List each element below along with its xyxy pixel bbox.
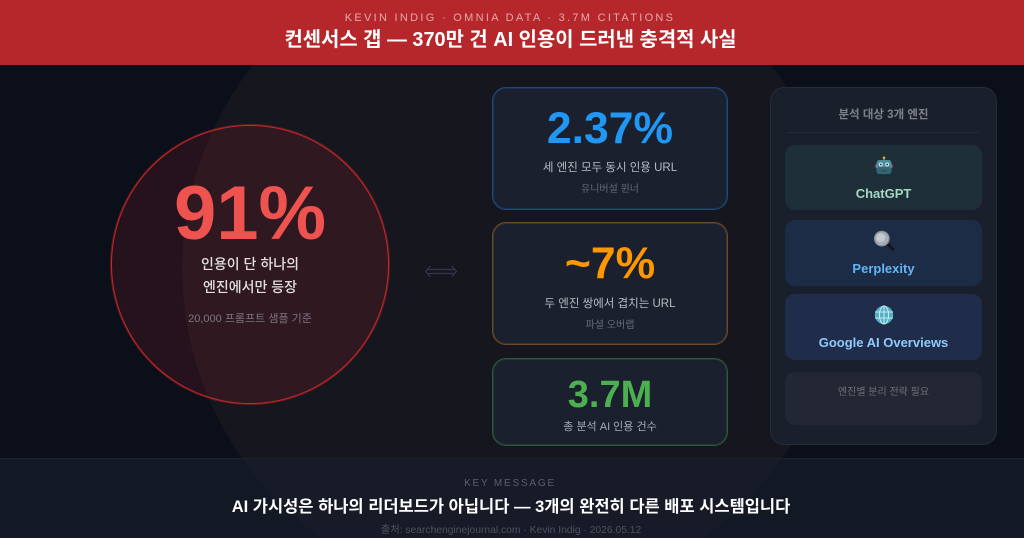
circle label: 인용이 단 하나의 <box>201 256 299 272</box>
source line: 출처: searchenginejournal.com · Kevin Indig · 2026.05.12 <box>381 525 641 536</box>
big circle: 91% <box>111 125 389 404</box>
circle label: 엔진에서만 등장 <box>203 279 297 295</box>
key message: AI 가시성은 하나의 리더보드가 아닙니다 — 3개의 완전히 다른 배포 시스템입니다 <box>232 498 790 516</box>
stat card: 3.7M <box>492 358 728 446</box>
footer eyebrow: KEY MESSAGE <box>464 478 556 489</box>
panel divider <box>787 132 979 133</box>
stat value: 2.37% <box>547 104 673 152</box>
double arrow <box>425 266 457 278</box>
stat note: 유니버설 윈너 <box>581 184 639 194</box>
header eyebrow: KEVIN INDIG · OMNIA DATA · 3.7M CITATIONS <box>345 12 675 24</box>
stat note: 파셜 오버랩 <box>586 320 634 330</box>
engine name: ChatGPT <box>856 186 911 201</box>
stat card: 2.37% <box>492 87 728 210</box>
icon: globe <box>874 306 894 324</box>
stat card: ~7% <box>492 222 728 345</box>
strategy note box <box>785 372 982 425</box>
stat label: 총 분석 AI 인용 건수 <box>563 420 657 432</box>
engine name: Google AI Overviews <box>819 335 948 350</box>
icon: robot <box>875 156 893 174</box>
engine: Google AI Overviews <box>785 294 982 360</box>
note text: 엔진별 분리 전략 필요 <box>838 387 929 398</box>
stat value: ~7% <box>565 238 655 288</box>
engine panel <box>770 87 997 445</box>
stat label: 두 엔진 쌍에서 겹치는 URL <box>544 298 676 310</box>
header band <box>0 0 1024 65</box>
background faint circle <box>182 0 842 538</box>
stat value: 3.7M <box>568 374 652 416</box>
stat label: 세 엔진 모두 동시 인용 URL <box>543 162 677 174</box>
engine name: Perplexity <box>852 261 915 276</box>
footer band <box>0 458 1024 538</box>
icon: magnifying glass <box>874 230 894 251</box>
engine: Perplexity <box>785 220 982 286</box>
engine: ChatGPT <box>785 145 982 210</box>
header title: 컨센서스 갭 — 370만 건 AI 인용이 드러낸 충격적 사실 <box>284 29 737 51</box>
circle note: 20,000 프롬프트 샘플 기준 <box>188 313 312 325</box>
panel heading: 분석 대상 3개 엔진 <box>838 109 929 121</box>
big number: 91% <box>174 171 326 256</box>
circle label <box>201 256 299 295</box>
